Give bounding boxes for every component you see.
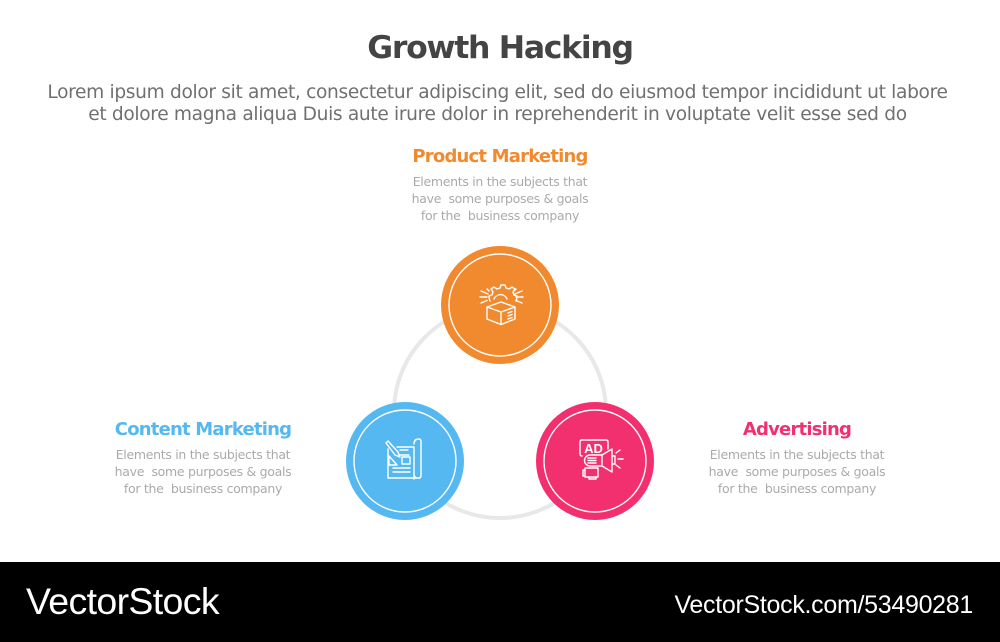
text: content marketing description xyxy=(115,447,291,496)
footer logo text: VectorStock xyxy=(26,580,219,622)
text: product marketing description: Elements in the subjects that xyxy=(413,174,587,189)
icon: notebook and pencil xyxy=(386,439,421,479)
text: advertising description: Elements in the subjects that xyxy=(710,447,884,462)
text: advertising description: have some purposes & goals xyxy=(709,464,885,479)
watermark footer bar xyxy=(0,562,1000,642)
node: content marketing xyxy=(346,402,464,520)
text: content marketing description: for the business company xyxy=(124,481,282,496)
icon: gear and box xyxy=(480,285,523,324)
text: content marketing description: have some purposes & goals xyxy=(115,464,291,479)
text: advertising description xyxy=(709,447,885,496)
text: product marketing description: for the business company xyxy=(421,208,579,223)
text: content marketing description: Elements in the subjects that xyxy=(116,447,290,462)
node: advertising xyxy=(536,402,654,520)
subtitle text: Lorem ipsum dolor sit amet, consectetur adipiscing elit, sed do eiusmod tempor incididunt ut labore xyxy=(47,82,948,103)
heading: advertising: Advertising xyxy=(743,419,851,440)
text: product marketing description: have some purposes & goals xyxy=(412,191,588,206)
heading: product marketing: Product Marketing xyxy=(412,146,588,167)
icon: ad megaphone xyxy=(580,440,623,479)
heading: content marketing: Content Marketing xyxy=(115,419,291,440)
text: advertising description: for the business company xyxy=(718,481,876,496)
subtitle text xyxy=(47,82,948,125)
icon label: AD: AD xyxy=(584,441,603,456)
footer image id: VectorStock.com/53490281 xyxy=(674,591,973,619)
node: product marketing xyxy=(441,246,559,364)
connecting ring xyxy=(394,306,606,518)
title: Growth Hacking xyxy=(367,30,633,66)
subtitle text: et dolore magna aliqua Duis aute irure dolor in reprehenderit in voluptate velit esse sed do xyxy=(88,104,907,125)
text: product marketing description xyxy=(412,174,588,223)
